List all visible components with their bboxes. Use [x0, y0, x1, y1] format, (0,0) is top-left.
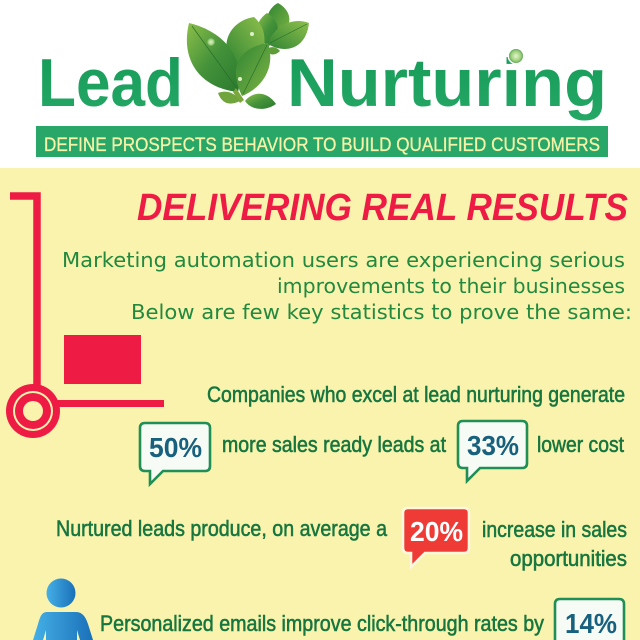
callout: 20%	[403, 508, 469, 567]
callout: 33%	[458, 421, 527, 481]
text block: intro: Marketing automation users are experiencing serious	[62, 248, 625, 272]
banner	[36, 126, 608, 157]
text: increase in sales opportunities: opportunities	[510, 546, 627, 571]
icon: green leaves	[187, 3, 309, 109]
icon: red hand truck	[6, 196, 164, 438]
text: nurtured leads: Nurtured leads produce, on average a	[56, 516, 388, 541]
icon: blue person	[33, 578, 93, 640]
text block: intro: Below are few key statistics to prove the same:	[131, 300, 632, 324]
title: Nurturing: Nurturing	[287, 45, 607, 121]
text block: intro	[62, 248, 632, 324]
callout: 20%: 20%	[410, 516, 463, 547]
text: personalized emails: Personalized emails improve click-through rates by	[100, 611, 544, 636]
callout: 50%: 50%	[149, 432, 202, 463]
text: increase in sales opportunities	[482, 517, 627, 571]
text block: intro: improvements to their businesses	[277, 274, 625, 298]
title: Lead: Lead	[38, 45, 183, 121]
text: more sales ready leads: more sales ready leads at	[222, 432, 446, 457]
panel: yellow background	[0, 168, 640, 640]
icon: water drop on title	[508, 48, 524, 64]
callout: 50%	[140, 423, 210, 484]
callout: 33%: 33%	[467, 430, 519, 461]
text: lower cost: lower cost	[537, 432, 624, 457]
callout: 14%: 14%	[565, 608, 617, 639]
callout: 14%	[555, 599, 624, 640]
